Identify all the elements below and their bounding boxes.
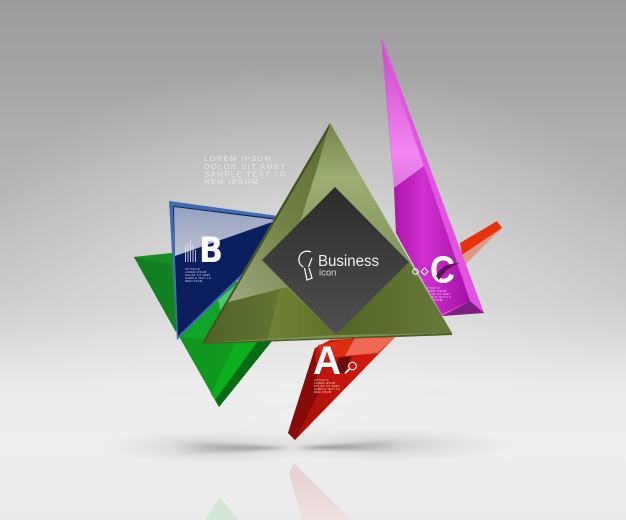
panel A: red triangle bbox=[288, 336, 396, 440]
option A small text: OPTION A bbox=[314, 378, 329, 382]
icon label: icon bbox=[319, 268, 336, 278]
option A small text: SAMPLE TEXT LO bbox=[314, 387, 340, 391]
red bar behind magenta panel bbox=[460, 221, 502, 265]
option C small text: SAMPLE TEXT LO bbox=[425, 295, 451, 299]
panel B: blue triangle bbox=[169, 201, 300, 340]
option A small text: REM IPSUM bbox=[314, 390, 331, 394]
option A small text bbox=[314, 378, 340, 394]
reflection: green triangle bbox=[205, 497, 238, 520]
caption: lorem ipsum text: SAMPLE TEXT LO bbox=[204, 170, 287, 178]
option C small text: REM IPSUM bbox=[425, 298, 442, 302]
letter B: B bbox=[199, 231, 223, 271]
panel: green triangle bbox=[134, 253, 272, 407]
panel C: magenta triangle bbox=[381, 36, 484, 316]
option B small text: OPTION B bbox=[185, 267, 200, 271]
option C small text: DOLOR SIT AMET bbox=[425, 292, 451, 296]
panel: central olive triangle bbox=[202, 123, 452, 344]
option A small text: DOLOR SIT AMET bbox=[314, 384, 340, 388]
dark diamond bbox=[262, 187, 409, 335]
option C small text: LOREM IPSUM bbox=[425, 289, 446, 293]
letter C: C bbox=[430, 250, 455, 292]
icon: magnifier bbox=[345, 362, 356, 374]
letter A: A bbox=[313, 339, 341, 383]
option A small text: LOREM IPSUM bbox=[314, 381, 335, 385]
reflection: red triangle bbox=[289, 463, 351, 520]
caption: lorem ipsum text: DOLOR SIT AMET bbox=[204, 162, 286, 171]
option B small text: DOLOR SIT AMET bbox=[185, 273, 211, 277]
option B small text: REM IPSUM bbox=[185, 279, 202, 283]
icon: light bulb / key bbox=[299, 251, 312, 280]
floor shadow bbox=[100, 427, 510, 465]
icon: circle and diamond bbox=[413, 268, 428, 275]
caption: lorem ipsum text: REM IPSUM bbox=[204, 177, 259, 186]
letter C dark swoosh bbox=[436, 263, 460, 280]
option B small text: LOREM IPSUM bbox=[185, 270, 206, 274]
option B small text bbox=[185, 267, 211, 283]
caption: lorem ipsum text bbox=[204, 154, 287, 186]
option B small text: SAMPLE TEXT LO bbox=[185, 276, 211, 280]
icon: bars bbox=[186, 240, 196, 262]
option C small text: OPTION C bbox=[425, 286, 440, 290]
business label: Business bbox=[318, 253, 379, 270]
caption: lorem ipsum text: LOREM IPSUM bbox=[204, 154, 272, 163]
option C small text bbox=[425, 286, 451, 302]
